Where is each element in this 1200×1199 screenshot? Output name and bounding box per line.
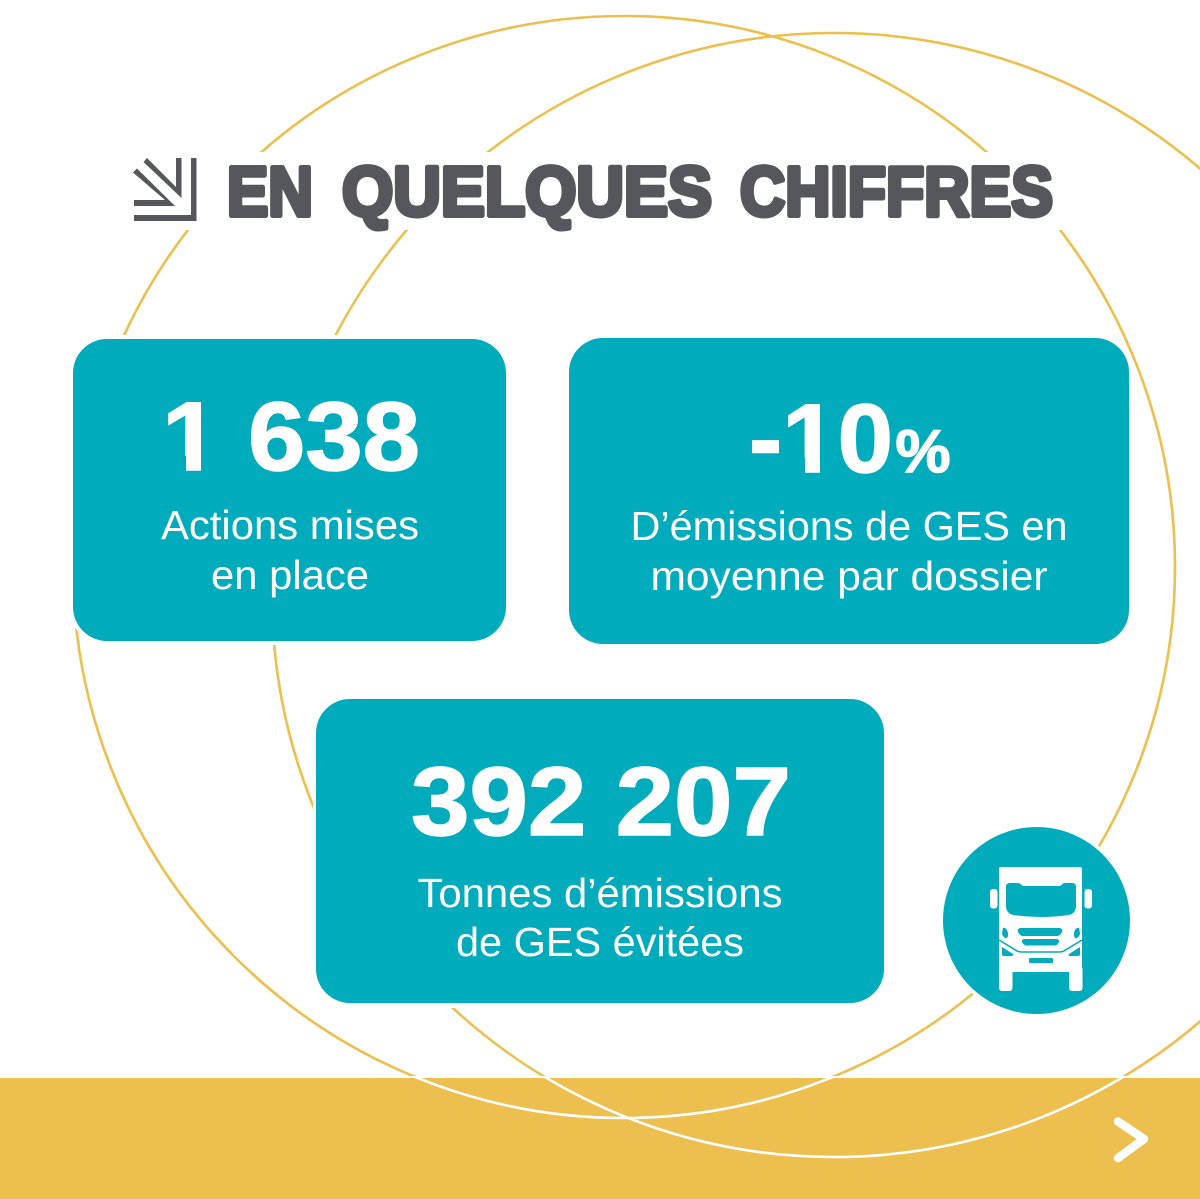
label: tonnes <box>418 870 782 965</box>
icon: title arrow <box>133 158 196 221</box>
panel: tonnes <box>313 695 888 1008</box>
label: actions: Actions mises <box>161 502 419 548</box>
number: actions: 1 638 <box>162 382 420 491</box>
title: EN <box>227 152 313 230</box>
label: tonnes: Tonnes d’émissions <box>418 870 782 916</box>
yellow footer band <box>0 1078 1200 1199</box>
title backdrop <box>125 152 1065 230</box>
number: tonnes: 392 207 <box>411 747 791 856</box>
panel: emissions <box>565 334 1133 648</box>
label: emissions: D’émissions de GES en <box>630 503 1068 549</box>
label: tonnes: de GES évitées <box>456 919 744 965</box>
label: actions: en place <box>211 552 369 598</box>
panel: actions <box>69 335 510 645</box>
number: percentage: % <box>896 418 950 485</box>
number: percentage: -10 <box>749 384 893 493</box>
title: CHIFFRES <box>740 152 1053 230</box>
number: percentage <box>749 384 950 493</box>
label: actions <box>161 502 419 598</box>
label: emissions: moyenne par dossier <box>650 553 1048 599</box>
icon: truck <box>940 824 1134 1018</box>
icon: next arrow <box>1118 1122 1144 1158</box>
title <box>227 152 1053 230</box>
title: QUELQUES <box>342 152 712 230</box>
label: emissions <box>630 503 1068 599</box>
